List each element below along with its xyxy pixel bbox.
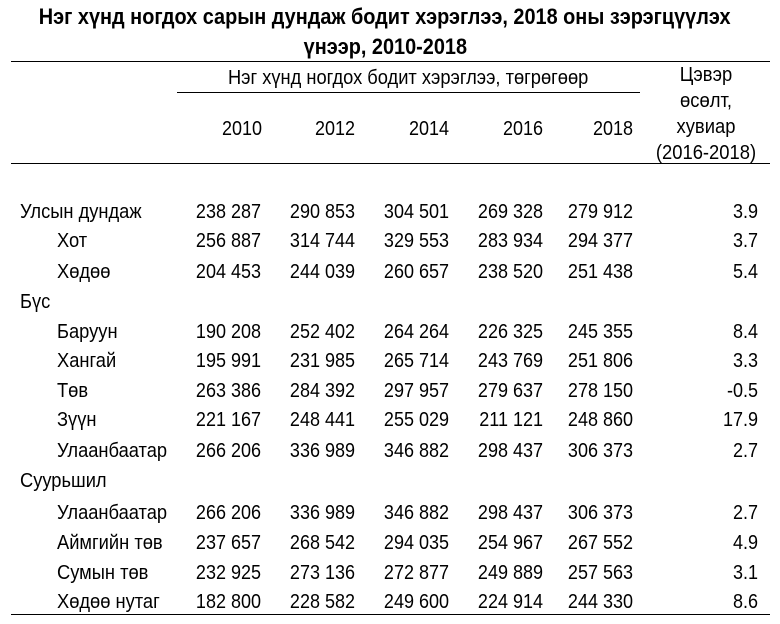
row: Төв: 263 386: [196, 380, 261, 402]
row: Улаанбаатар (бүс): [57, 440, 758, 462]
row: Төв: 278 150: [568, 380, 633, 402]
row: Аймгийн төв: 294 035: [384, 532, 449, 554]
row: Хангай: 231 985: [290, 350, 355, 372]
row: Хөдөө нутаг: 244 330: [568, 591, 633, 613]
row: Сумын төв: 257 563: [568, 562, 633, 584]
row: Хөдөө нутаг: Хөдөө нутаг: [57, 591, 160, 613]
row: Хот: 3.7: [733, 230, 758, 252]
row: Аймгийн төв: 268 542: [290, 532, 355, 554]
row: Хөдөө нутаг: 8.6: [733, 591, 758, 613]
row: Сумын төв: 232 925: [196, 562, 261, 584]
year headers: 2016: [503, 118, 543, 140]
row: Хөдөө: 251 438: [568, 261, 633, 283]
row: Улсын дундаж: 290 853: [290, 201, 355, 223]
row: Хангай: 243 769: [478, 350, 543, 372]
row: Төв: -0.5: [727, 380, 758, 402]
section label: Суурьшил: Суурьшил: [20, 470, 107, 492]
row: Хангай: 251 806: [568, 350, 633, 372]
row: Улсын дундаж: 279 912: [568, 201, 633, 223]
year headers: [222, 118, 633, 140]
row: Улаанбаатар (бүс): 298 437: [478, 440, 543, 462]
row: Зүүн: 248 441: [290, 409, 355, 431]
title: [39, 4, 731, 59]
row: Улаанбаатар (бүс): 266 206: [196, 440, 261, 462]
row: Сумын төв: Сумын төв: [57, 562, 148, 584]
row: Хөдөө нутаг: 249 600: [384, 591, 449, 613]
row: Баруун: 264 264: [384, 321, 449, 343]
row: Зүүн: 221 167: [196, 409, 261, 431]
row: Зүүн: 255 029: [384, 409, 449, 431]
row: Улсын дундаж: 3.9: [733, 201, 758, 223]
row: Улаанбаатар (суурьшил): Улаанбаатар: [57, 502, 167, 524]
row: Төв: [57, 380, 758, 402]
row: Зүүн: 17.9: [723, 409, 758, 431]
row: Төв: 284 392: [290, 380, 355, 402]
row: Улаанбаатар (суурьшил): 2.7: [733, 502, 758, 524]
row: Хөдөө нутаг: 182 800: [196, 591, 261, 613]
row: Баруун: [57, 321, 758, 343]
row: Хот: 329 553: [384, 230, 449, 252]
row: Зүүн: Зүүн: [57, 409, 96, 431]
title: Нэг хүнд ногдох сарын дундаж бодит хэрэглээ, 2018 оны зэрэгцүүлэх: [39, 4, 731, 29]
net growth heading: өсөлт,: [680, 90, 732, 112]
row: Хангай: 195 991: [196, 350, 261, 372]
row: Хангай: [57, 350, 758, 372]
year headers: 2018: [593, 118, 633, 140]
column group heading: Нэг хүнд ногдох бодит хэрэглээ, төгрөгөөр: [228, 67, 589, 89]
row: Төв: 279 637: [478, 380, 543, 402]
row: Хөдөө: 260 657: [384, 261, 449, 283]
row: Хөдөө нутаг: 224 914: [478, 591, 543, 613]
row: Улаанбаатар (бүс): 336 989: [290, 440, 355, 462]
row: Хот: 283 934: [478, 230, 543, 252]
row: Хот: 314 744: [290, 230, 355, 252]
row: Улсын дундаж: Улсын дундаж: [20, 201, 142, 223]
row: Аймгийн төв: 267 552: [568, 532, 633, 554]
row: Сумын төв: [57, 562, 758, 584]
row: Хөдөө: Хөдөө: [57, 261, 110, 283]
net growth heading: Цэвэр: [680, 64, 732, 86]
row: Төв: 297 957: [384, 380, 449, 402]
row: Улаанбаатар (суурьшил): 336 989: [290, 502, 355, 524]
row: Аймгийн төв: Аймгийн төв: [57, 532, 163, 554]
row: Хангай: 3.3: [733, 350, 758, 372]
row: Хот: 294 377: [568, 230, 633, 252]
net growth heading: (2016-2018): [656, 142, 756, 164]
row: Улсын дундаж: 238 287: [196, 201, 261, 223]
row: Улаанбаатар (бүс): 306 373: [568, 440, 633, 462]
row: Хөдөө: 204 453: [196, 261, 261, 283]
row: Баруун: Баруун: [57, 321, 118, 343]
row: Баруун: 8.4: [733, 321, 758, 343]
net growth heading: хувиар: [677, 116, 735, 138]
row: Сумын төв: 3.1: [733, 562, 758, 584]
row: Зүүн: 248 860: [568, 409, 633, 431]
row: Хот: [57, 230, 758, 252]
row: Аймгийн төв: 237 657: [196, 532, 261, 554]
row: Улсын дундаж: [20, 201, 758, 223]
row: Хөдөө: 5.4: [733, 261, 758, 283]
year headers: 2014: [409, 118, 449, 140]
row: Хот: 256 887: [196, 230, 261, 252]
title: үнээр, 2010-2018: [303, 34, 467, 59]
row: Сумын төв: 273 136: [290, 562, 355, 584]
row: Хангай: 265 714: [384, 350, 449, 372]
row: Баруун: 245 355: [568, 321, 633, 343]
row: Улаанбаатар (бүс): 2.7: [733, 440, 758, 462]
row: Хангай: Хангай: [57, 350, 116, 372]
row: Улаанбаатар (бүс): Улаанбаатар: [57, 440, 167, 462]
row: Улаанбаатар (бүс): 346 882: [384, 440, 449, 462]
row: Сумын төв: 249 889: [478, 562, 543, 584]
row: Хөдөө нутаг: 228 582: [290, 591, 355, 613]
row: Төв: Төв: [57, 380, 88, 402]
row: Зүүн: [57, 409, 758, 431]
row: Улаанбаатар (суурьшил): 346 882: [384, 502, 449, 524]
row: Зүүн: 211 121: [479, 409, 543, 431]
row: Баруун: 190 208: [196, 321, 261, 343]
row: Хөдөө: 238 520: [478, 261, 543, 283]
row: Аймгийн төв: 4.9: [733, 532, 758, 554]
row: Хөдөө: [57, 261, 758, 283]
row: Аймгийн төв: 254 967: [478, 532, 543, 554]
row: Баруун: 226 325: [478, 321, 543, 343]
row: Баруун: 252 402: [290, 321, 355, 343]
row: Хот: Хот: [57, 230, 87, 252]
net growth heading: [656, 64, 756, 164]
row: Аймгийн төв: [57, 532, 758, 554]
row: Улсын дундаж: 304 501: [384, 201, 449, 223]
row: Улаанбаатар (суурьшил): [57, 502, 758, 524]
year headers: 2012: [315, 118, 355, 140]
row: Сумын төв: 272 877: [384, 562, 449, 584]
row: Хөдөө: 244 039: [290, 261, 355, 283]
row: Улаанбаатар (суурьшил): 306 373: [568, 502, 633, 524]
row: Хөдөө нутаг: [57, 591, 758, 613]
row: Улаанбаатар (суурьшил): 266 206: [196, 502, 261, 524]
section label: Бүс: Бүс: [20, 291, 50, 313]
row: Улсын дундаж: 269 328: [478, 201, 543, 223]
year headers: 2010: [222, 118, 262, 140]
row: Улаанбаатар (суурьшил): 298 437: [478, 502, 543, 524]
